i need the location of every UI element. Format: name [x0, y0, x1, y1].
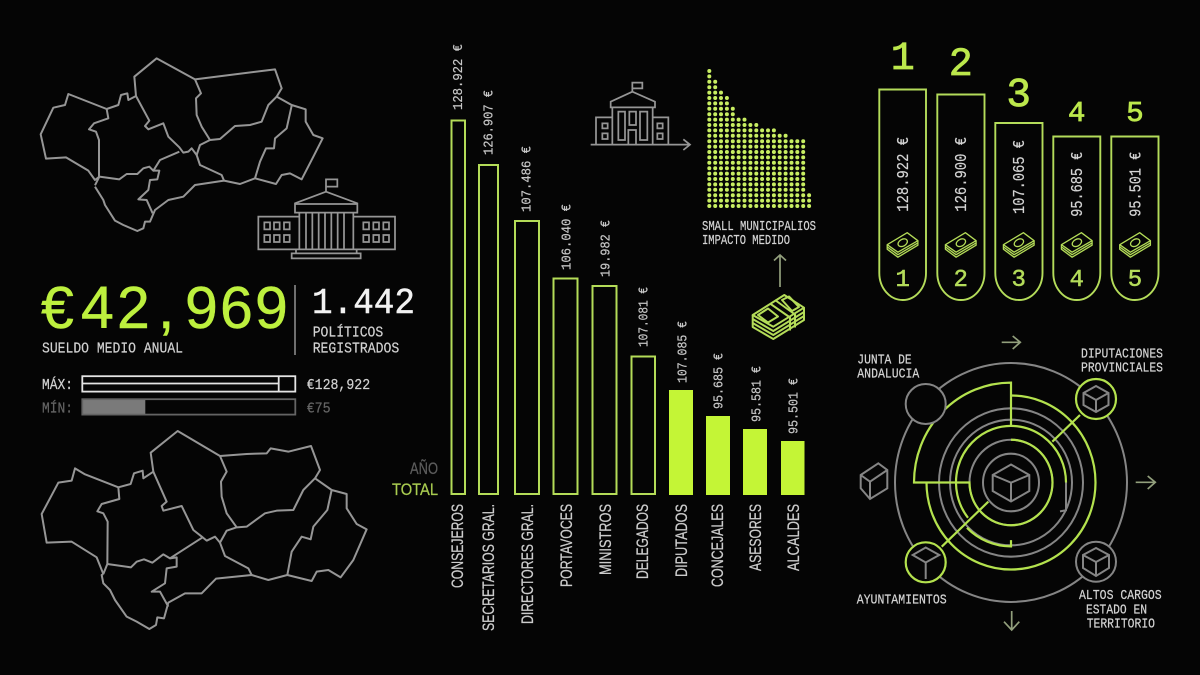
label: Altos cargos	[1079, 589, 1162, 633]
value labels: 95.501 €	[787, 378, 803, 434]
icon: government building large	[258, 179, 395, 258]
node: Ayuntamientos	[906, 542, 946, 582]
rank 1	[879, 37, 926, 300]
dot matrix chart	[709, 70, 809, 206]
stat: registered politicians: REGISTRADOS	[313, 341, 399, 358]
category labels: MINISTROS	[597, 504, 615, 575]
rank 5: 5	[1126, 97, 1144, 130]
value labels: 107.486 €	[520, 146, 536, 212]
label: Altos cargos: ALTOS CARGOS	[1079, 589, 1162, 604]
count: 1.442	[312, 283, 415, 324]
rank 3	[995, 73, 1042, 300]
label: Junta de Andalucía: ANDALUCIA	[857, 368, 920, 383]
rank 4	[1053, 97, 1100, 300]
map: Andalucía provinces top	[41, 58, 323, 231]
rank 3: 3	[1006, 73, 1031, 119]
arrow: right	[1136, 476, 1155, 489]
rank 2	[937, 43, 984, 300]
rings	[895, 363, 1127, 602]
value labels: 95.581 €	[750, 366, 766, 422]
label: Diputaciones provinciales: PROVINCIALES	[1081, 362, 1163, 377]
range bar: minimum	[42, 399, 331, 418]
rank 2: 2	[953, 267, 968, 294]
node: Junta de Andalucía	[906, 384, 946, 424]
axis label: total: TOTAL	[392, 481, 438, 499]
category labels	[449, 504, 803, 631]
rank 2: 2	[949, 43, 973, 88]
category labels: CONSEJEROS	[449, 504, 467, 588]
icon: money stack	[753, 295, 804, 339]
label: Altos cargos: ESTADO EN	[1086, 603, 1147, 618]
value labels: 95.685 €	[712, 353, 728, 409]
axis label: año: AÑO	[410, 458, 438, 478]
label: Junta de Andalucía	[857, 353, 920, 383]
range bar: minimum: €75	[307, 401, 331, 418]
rank 2: 126.900 €	[952, 137, 971, 212]
rank 5: 5	[1128, 267, 1142, 294]
stat: average salary	[41, 275, 288, 358]
value labels: 106.040 €	[560, 204, 576, 270]
dot matrix caption: IMPACTO MEDIDO	[702, 234, 790, 249]
bar chart: salaries by post	[392, 44, 804, 631]
value labels: 126.907 €	[482, 90, 498, 155]
category labels: PORTAVOCES	[558, 504, 576, 587]
label: Diputaciones provinciales	[1081, 347, 1163, 377]
bars	[452, 120, 804, 495]
category labels: SECRETARIOS GRAL.	[480, 504, 498, 631]
label: Junta de Andalucía: JUNTA DE	[857, 353, 912, 368]
arrow: down	[1004, 611, 1019, 630]
left cube	[861, 463, 887, 499]
node: Diputaciones provinciales	[1076, 379, 1116, 419]
value labels: 128.922 €	[451, 44, 467, 110]
big number: €42,969	[41, 275, 288, 341]
value labels: 19.982 €	[599, 220, 615, 277]
stat: registered politicians	[312, 283, 415, 358]
icon: small building with arrow	[591, 83, 690, 150]
category labels: ALCALDES	[785, 504, 803, 571]
radial diagram: institutions	[857, 336, 1163, 633]
dot matrix caption	[702, 220, 816, 249]
rank 5	[1111, 97, 1158, 300]
category labels: ASESORES	[747, 504, 765, 571]
range bar: minimum: MÍN:	[42, 400, 73, 418]
center cube	[993, 464, 1029, 502]
value labels	[451, 44, 803, 434]
dot matrix caption: SMALL MUNICIPALIOS	[702, 220, 816, 235]
rank 4: 4	[1069, 267, 1084, 294]
rank 3: 3	[1011, 267, 1026, 294]
node: Altos cargos	[1076, 542, 1116, 582]
range bar: maximum	[42, 376, 370, 394]
arrow: top	[1002, 336, 1020, 349]
category labels: DIRECTORES GRAL.	[519, 504, 537, 624]
caption: SUELDO MEDIO ANUAL	[42, 341, 183, 358]
value labels: 107.085 €	[676, 321, 692, 383]
rank 5: 95.501 €	[1126, 152, 1146, 217]
map: Andalucía provinces bottom	[42, 431, 367, 629]
category labels: DELEGADOS	[634, 504, 652, 579]
rank 1: 1	[891, 37, 915, 82]
label: Ayuntamientos: AYUNTAMIENTOS	[857, 593, 947, 608]
ranking top five	[879, 37, 1158, 300]
rank 4: 95.685 €	[1068, 152, 1087, 217]
connector lines	[942, 415, 1080, 547]
label: Altos cargos: TERRITORIO	[1087, 618, 1155, 633]
category labels: DIPUTADOS	[673, 504, 691, 577]
range bar: maximum: €128,922	[307, 377, 370, 394]
count caption: POLÍTICOS	[313, 324, 383, 342]
category labels: CONCEJALES	[709, 504, 727, 587]
arrow: up	[774, 255, 786, 287]
label: Diputaciones provinciales: DIPUTACIONES	[1081, 347, 1163, 362]
value labels: 107.081 €	[637, 287, 653, 347]
rank 1: 128.922 €	[894, 137, 913, 212]
rank 1: 1	[895, 267, 910, 294]
range bar: maximum: MÁX:	[42, 376, 73, 394]
rank 3: 107.065 €	[1010, 140, 1029, 214]
rank 4: 4	[1068, 97, 1085, 130]
